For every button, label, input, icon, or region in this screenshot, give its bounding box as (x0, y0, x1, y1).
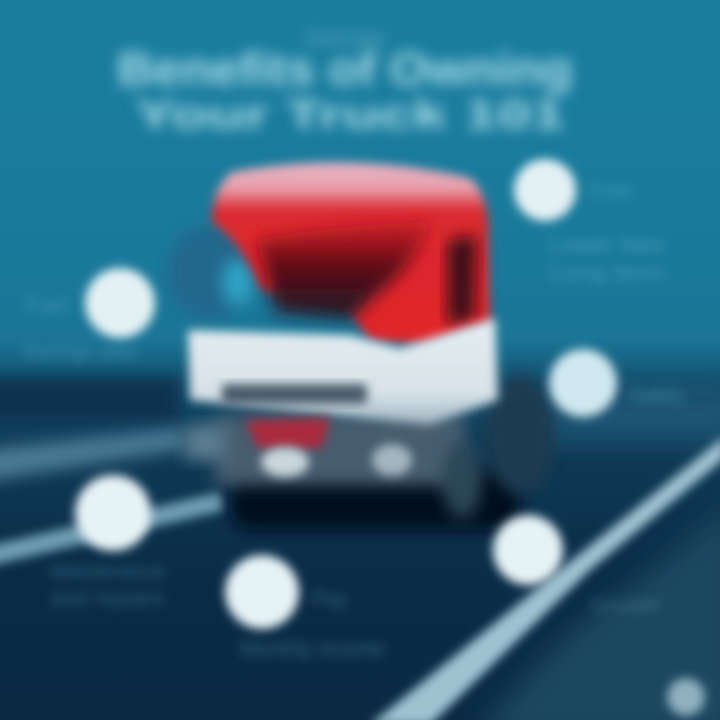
callout text: Pay (312, 586, 347, 611)
icon circle (493, 515, 563, 585)
truck (168, 162, 554, 530)
callout text: Growth (590, 595, 660, 617)
white front (188, 318, 498, 425)
callout: bottom right (493, 515, 660, 617)
windshield (255, 222, 432, 320)
icon circle (514, 159, 576, 221)
callout text: Long term (550, 260, 665, 285)
title: Benefits of Owning (118, 43, 572, 95)
callout text (550, 180, 665, 285)
callout text: Safety (630, 385, 685, 407)
title: Overview (305, 29, 386, 49)
callout text: Fuel (25, 292, 67, 317)
logo badge (667, 678, 705, 716)
icon circle (75, 475, 151, 551)
road edge line (370, 436, 720, 720)
callout text: Lower fees (550, 232, 665, 257)
callout: lower left (50, 475, 165, 610)
callout: right (549, 349, 685, 417)
headlights (261, 447, 309, 477)
icon circle (225, 555, 299, 629)
callout text (20, 292, 140, 363)
icon circle (549, 349, 617, 417)
callout text: Monthly income (240, 636, 385, 661)
callout text (50, 561, 165, 610)
callout text: Cost (590, 180, 632, 202)
callout: top right (514, 159, 665, 285)
icon circle (85, 268, 155, 338)
truck shadow and lower body (230, 470, 520, 530)
title (118, 29, 572, 137)
red cab (212, 162, 490, 345)
callout text (240, 586, 385, 661)
grille (222, 384, 367, 404)
callout: bottom center (225, 555, 385, 661)
road and horizon (0, 378, 720, 720)
red marks (245, 418, 330, 448)
callout: left (20, 268, 155, 363)
side mirror (168, 226, 252, 318)
callout text: and repairs (50, 588, 165, 610)
callout text: Maintenance (50, 561, 165, 583)
callout text: Savings plan (20, 341, 140, 363)
title: Your Truck 101 (135, 93, 565, 137)
